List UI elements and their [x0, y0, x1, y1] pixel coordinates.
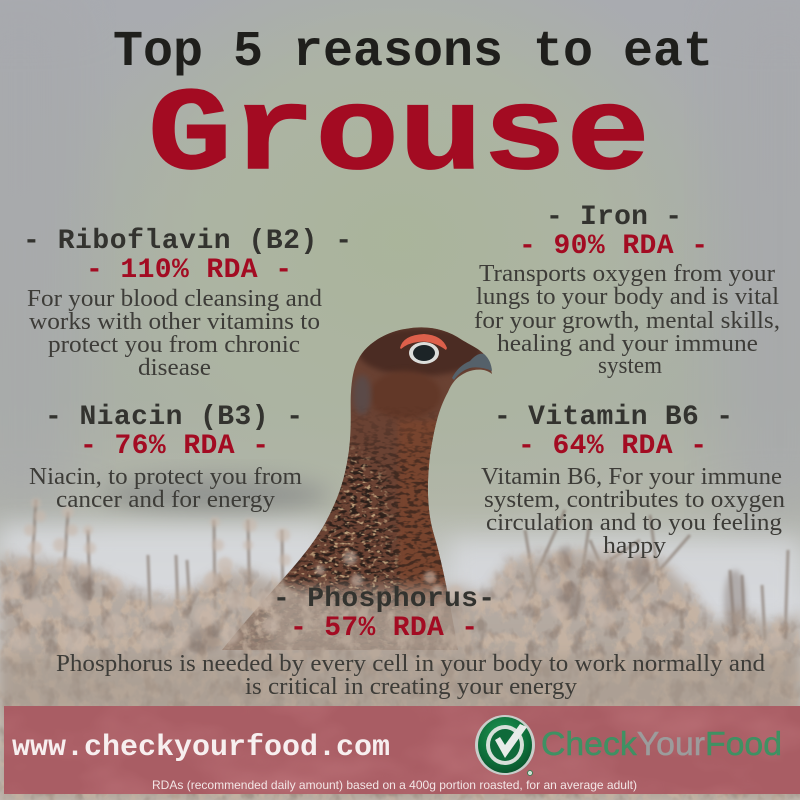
phosphorus heading: - Phosphorus- [273, 584, 495, 615]
vitamin B6 heading: - Vitamin B6 - [494, 402, 733, 433]
niacin description: Niacin, to protect you from [29, 464, 302, 490]
panel: riboflavin [23, 226, 352, 381]
iron heading: - Iron - [546, 202, 682, 233]
vitamin B6 description: system, contributes to oxygen [484, 487, 785, 513]
vitamin B6 description: Vitamin B6, For your immune [481, 464, 782, 490]
heading: Grouse: Grouse [148, 71, 650, 204]
riboflavin RDA: - 110% RDA - [86, 255, 292, 286]
icon: bird eye [409, 342, 439, 364]
iron description: healing and your immune [497, 331, 758, 357]
niacin RDA: - 76% RDA - [80, 431, 269, 462]
phosphorus description: Phosphorus is needed by every cell in your body to work normally and [56, 651, 765, 677]
niacin description [29, 464, 302, 513]
heather foreground [0, 490, 800, 800]
iron description: lungs to your body and is vital [476, 284, 779, 310]
phosphorus description [56, 651, 765, 700]
iron description: system [598, 353, 662, 379]
riboflavin description: disease [138, 355, 211, 381]
riboflavin heading: - Riboflavin (B2) - [23, 226, 352, 257]
icon: red eye comb [400, 334, 447, 350]
riboflavin description: works with other vitamins to [29, 309, 320, 335]
title [113, 24, 713, 204]
riboflavin description [27, 286, 322, 381]
phosphorus description: is critical in creating your energy [245, 674, 577, 700]
website url: www.checkyourfood.com [12, 731, 390, 765]
panel: phosphorus [56, 584, 765, 700]
dark heather stems [21, 546, 746, 652]
heather flower clusters [3, 498, 783, 653]
iron description: Transports oxygen from your [479, 261, 775, 287]
iron description: for your growth, mental skills, [474, 308, 780, 334]
niacin description: cancer and for energy [56, 487, 275, 513]
heading: top 5 reasons to eat: Top 5 reasons to eat [113, 24, 713, 81]
RDA footnote: RDAs (recommended daily amount) based on a 400g portion roasted, for an average adult) [152, 778, 637, 792]
vitamin B6 description: circulation and to you feeling [486, 510, 782, 536]
iron description [474, 261, 780, 379]
niacin heading: - Niacin (B3) - [45, 402, 303, 433]
vitamin B6 description: happy [603, 533, 666, 559]
riboflavin description: protect you from chronic [48, 332, 300, 358]
riboflavin description: For your blood cleansing and [27, 286, 322, 312]
panel: vitamin B6 [481, 402, 785, 559]
iron RDA: - 90% RDA - [519, 231, 708, 262]
panel: niacin [29, 402, 303, 513]
vitamin B6 RDA: - 64% RDA - [518, 431, 707, 462]
phosphorus RDA: - 57% RDA - [290, 613, 478, 644]
logo wordmark: CheckYourFood [541, 725, 782, 762]
icon: CheckYourFood logo badge [475, 715, 535, 776]
footer band [4, 706, 800, 794]
panel: iron [474, 202, 780, 379]
icon: beak [452, 354, 492, 380]
vitamin B6 description [481, 464, 785, 559]
grouse bird [215, 327, 492, 655]
